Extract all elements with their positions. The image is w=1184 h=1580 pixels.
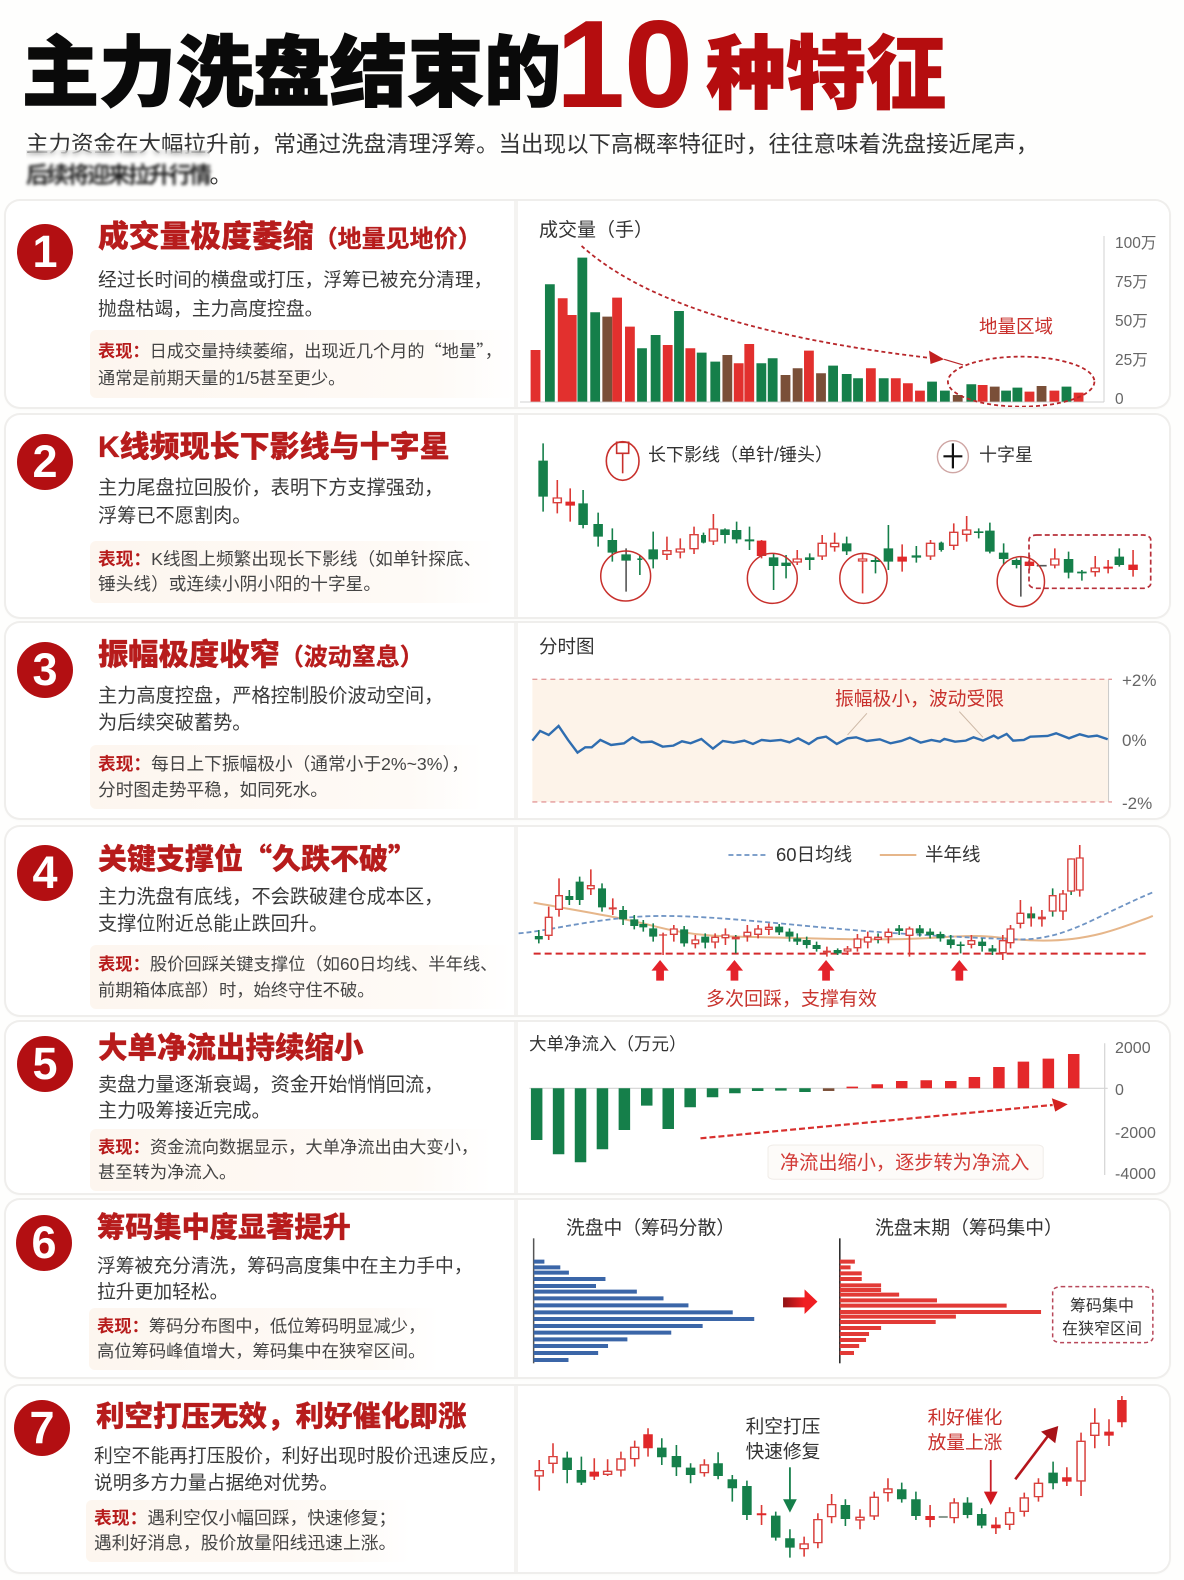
red concentrated chips — [840, 1238, 1041, 1363]
number badge 2: 2 — [32, 436, 58, 487]
evidence text 6 — [89, 1308, 439, 1370]
evidence text 1: 通常是前期天量的1/5甚至更少。 — [98, 368, 345, 388]
evidence text 4 — [90, 945, 511, 1009]
evidence text 5: 甚至转为净流入。 — [98, 1162, 236, 1182]
intraday title: 分时图 — [539, 636, 595, 657]
body text 2 — [98, 477, 443, 527]
body text 3: 为后续突破蓄势。 — [98, 712, 252, 734]
number badge 3 — [17, 642, 73, 698]
low volume ellipse — [948, 357, 1094, 407]
volume bars — [536, 246, 1094, 407]
body text 7 — [94, 1444, 507, 1492]
volume chart title: 成交量（手） — [539, 219, 653, 241]
body text 5 — [98, 1074, 443, 1122]
chart: intraday line — [514, 623, 1169, 818]
dashed consolidation box — [1029, 535, 1151, 588]
moving average legend labels — [776, 844, 981, 865]
heading 1: 成交量极度萎缩（地量见地价） — [98, 219, 482, 254]
bullish news label — [928, 1407, 1003, 1453]
body text 7: 利空不能再打压股价，利好出现时股价迅速反应， — [94, 1444, 507, 1466]
axis labels: 0% — [1122, 731, 1147, 750]
inflow bars — [852, 1054, 1074, 1088]
bearish news label: 快速修复 — [746, 1441, 820, 1462]
axis labels — [1122, 671, 1156, 813]
panel: 5 big order flow — [6, 1022, 1169, 1193]
panel: 4 support — [6, 827, 1169, 1015]
candlesticks — [543, 443, 1133, 597]
body text 6 — [97, 1255, 473, 1302]
evidence text 3 — [90, 745, 483, 809]
volume axis labels — [1115, 235, 1156, 408]
note text — [1062, 1297, 1142, 1338]
body text 4: 支撑位附近总能止跌回升。 — [98, 914, 328, 934]
axis labels — [1115, 1040, 1156, 1183]
heading 4: 关键支撑位“久跌不破” — [98, 836, 417, 878]
heading 3: 振幅极度收窄（波动窒息） — [98, 639, 424, 672]
low volume label: 地量区域 — [979, 316, 1053, 337]
number badge 5: 5 — [32, 1038, 58, 1089]
transition arrow — [783, 1289, 817, 1314]
annotation text: 净流出缩小，逐步转为净流入 — [780, 1152, 1029, 1174]
evidence text 4: 表现：股价回踩关键支撑位（如60日均线、半年线、 — [98, 954, 497, 974]
volume axis labels: 75万 — [1115, 274, 1148, 291]
title: red part: 种特征 — [706, 10, 946, 126]
chart: candlesticks with long shadows — [514, 415, 1169, 617]
half-year line — [534, 903, 1153, 941]
body text 2: 主力尾盘拉回股价，表明下方支撑强劲， — [98, 478, 443, 499]
chart: support candles — [514, 827, 1169, 1015]
note text: 筹码集中 — [1070, 1297, 1134, 1315]
decline trend arrow — [582, 246, 963, 365]
number badge 6: 6 — [31, 1217, 57, 1268]
support annotation: 多次回踩，支撑有效 — [706, 988, 877, 1010]
axis labels: 0 — [1115, 1082, 1124, 1099]
evidence text 6: 高位筹码峰值增大，筹码集中在狭窄区间。 — [97, 1340, 425, 1360]
evidence text 4: 前期箱体底部）时，始终守住不破。 — [98, 980, 375, 1000]
evidence text 3: 分时图走势平稳，如同死水。 — [98, 780, 328, 800]
title: number 10: 10 — [556, 0, 692, 134]
bearish news label — [746, 1416, 820, 1462]
evidence text 2: 锤头线）或连续小阴小阳的十字星。 — [98, 574, 381, 594]
intraday price line — [532, 726, 1108, 753]
chip chart titles — [566, 1217, 1063, 1238]
candlesticks — [539, 1396, 1122, 1558]
number badge 1 — [17, 224, 73, 280]
body text 6: 浮筹被充分清洗，筹码高度集中在主力手中， — [97, 1255, 473, 1276]
heading 7: 利空打压无效，利好催化即涨 — [96, 1401, 467, 1433]
heading 6: 筹码集中度显著提升 — [97, 1211, 351, 1243]
volume axis labels: 50万 — [1115, 313, 1148, 330]
number badge 4: 4 — [32, 847, 58, 898]
volume axes — [520, 236, 1104, 402]
body text 3 — [98, 685, 443, 734]
number badge 7 — [14, 1400, 70, 1456]
intro text: 。 — [210, 163, 232, 188]
trend arrow — [700, 1098, 1068, 1138]
evidence text 1 — [90, 330, 516, 398]
legend swatches — [728, 854, 766, 856]
body text 1: 抛盘枯竭，主力高度控盘。 — [98, 298, 323, 319]
dashed note box — [1053, 1287, 1153, 1343]
chart: net inflow bars — [514, 1022, 1169, 1193]
axis labels: -2% — [1122, 794, 1152, 813]
axis labels: -2000 — [1115, 1125, 1156, 1142]
chart: chip distribution — [514, 1200, 1169, 1377]
number badge 1: 1 — [32, 226, 58, 277]
rising diagonal arrow — [1015, 1426, 1058, 1479]
bearish news label: 利空打压 — [746, 1416, 820, 1437]
body text 5: 卖盘力量逐渐衰竭，资金开始悄悄回流， — [98, 1075, 443, 1096]
legend icon: hammer — [606, 442, 639, 480]
volume axis labels: 100万 — [1115, 235, 1156, 252]
body text 3: 主力高度控盘，严格控制股价波动空间， — [98, 686, 443, 706]
heading 5: 大单净流出持续缩小 — [98, 1032, 364, 1065]
leader lines — [848, 712, 983, 737]
number badge 6 — [16, 1215, 72, 1271]
evidence text 2: 表现：K线图上频繁出现长下影线（如单针探底、 — [98, 549, 481, 569]
legend labels — [648, 445, 1033, 465]
blue dispersed chips — [534, 1238, 754, 1363]
red bullish news arrow — [984, 1460, 998, 1505]
body text 5: 主力吸筹接近完成。 — [98, 1101, 271, 1122]
net inflow title: 大单净流入（万元） — [529, 1034, 686, 1054]
body text 6: 拉升更加轻松。 — [97, 1281, 228, 1302]
evidence text 1: 表现：日成交量持续萎缩，出现近几个月的“地量”， — [98, 337, 502, 362]
title — [22, 0, 946, 134]
axis labels: 2000 — [1115, 1040, 1151, 1057]
legend labels: 长下影线（单针/锤头） — [648, 445, 833, 465]
green bearish news arrow — [783, 1467, 797, 1513]
note text: 在狭窄区间 — [1062, 1320, 1142, 1338]
support dashed line — [534, 953, 1146, 955]
volume axis labels: 25万 — [1115, 352, 1148, 369]
panel: 6 chip concentration — [6, 1200, 1169, 1377]
intro text: 后续将迎来拉升行情 — [26, 163, 210, 188]
evidence text 2 — [90, 541, 495, 603]
evidence text 6: 表现：筹码分布图中，低位筹码明显减少， — [97, 1316, 425, 1336]
narrow range band — [532, 679, 1109, 802]
panel: 1 volume — [6, 201, 1169, 407]
bullish news label: 利好催化 — [928, 1407, 1002, 1428]
evidence text 5 — [90, 1128, 492, 1190]
moving average legend labels: 60日均线 — [776, 844, 852, 865]
body text 1: 经过长时间的横盘或打压，浮筹已被充分清理， — [98, 269, 492, 290]
axis labels: -4000 — [1115, 1166, 1156, 1183]
axis labels: +2% — [1122, 671, 1156, 690]
chip chart titles: 洗盘中（筹码分散） — [566, 1217, 735, 1238]
title: black part: 主力洗盘结束的 — [22, 12, 561, 123]
red circles marking long lower shadows — [601, 551, 1044, 607]
candlesticks — [539, 845, 1080, 960]
red arrows at support — [651, 960, 968, 981]
axes — [529, 1043, 1108, 1175]
60-day line — [519, 892, 1153, 939]
body text 4: 主力洗盘有底线，不会跌破建仓成本区， — [98, 886, 443, 908]
legend icon: doji — [937, 441, 968, 473]
legend labels: 十字星 — [979, 445, 1033, 465]
moving average legend labels: 半年线 — [925, 844, 981, 865]
evidence text 3: 表现：每日上下振幅极小（通常小于2%~3%）， — [98, 754, 469, 774]
evidence text 7: 表现：遇利空仅小幅回踩，快速修复； — [94, 1508, 396, 1528]
panel: 2 candlesticks — [6, 415, 1169, 617]
outflow bars — [537, 1088, 805, 1162]
chip chart titles: 洗盘末期（筹码集中） — [875, 1217, 1063, 1238]
annotation box — [768, 1145, 1043, 1179]
evidence text 7: 遇利好消息，股价放量阳线迅速上涨。 — [94, 1532, 396, 1552]
panel: 3 amplitude — [6, 623, 1169, 818]
number badge 3: 3 — [32, 644, 58, 695]
number badge 5 — [17, 1036, 73, 1092]
chart: news reaction candles — [514, 1386, 1169, 1572]
number badge 4 — [17, 845, 73, 901]
number badge 7: 7 — [29, 1402, 55, 1453]
number badge 2 — [17, 434, 73, 490]
heading 2: K线频现长下影线与十字星 — [98, 431, 450, 464]
body text 2: 浮筹已不愿割肉。 — [98, 506, 252, 527]
body text 1 — [98, 269, 492, 319]
intro text: 主力资金在大幅拉升前，常通过洗盘清理浮筹。当出现以下高概率特征时，往往意味着洗盘接近尾声， — [26, 132, 1039, 157]
panel: 7 news reaction — [6, 1386, 1169, 1572]
body text 7: 说明多方力量占据绝对优势。 — [94, 1472, 338, 1492]
bullish news label: 放量上涨 — [928, 1432, 1003, 1453]
body text 4 — [98, 886, 443, 934]
evidence text 7 — [86, 1500, 410, 1562]
chart: volume bars — [514, 201, 1169, 407]
evidence text 5: 表现：资金流向数据显示，大单净流出由大变小， — [98, 1136, 478, 1156]
amplitude annotation: 振幅极小，波动受限 — [835, 688, 1004, 709]
